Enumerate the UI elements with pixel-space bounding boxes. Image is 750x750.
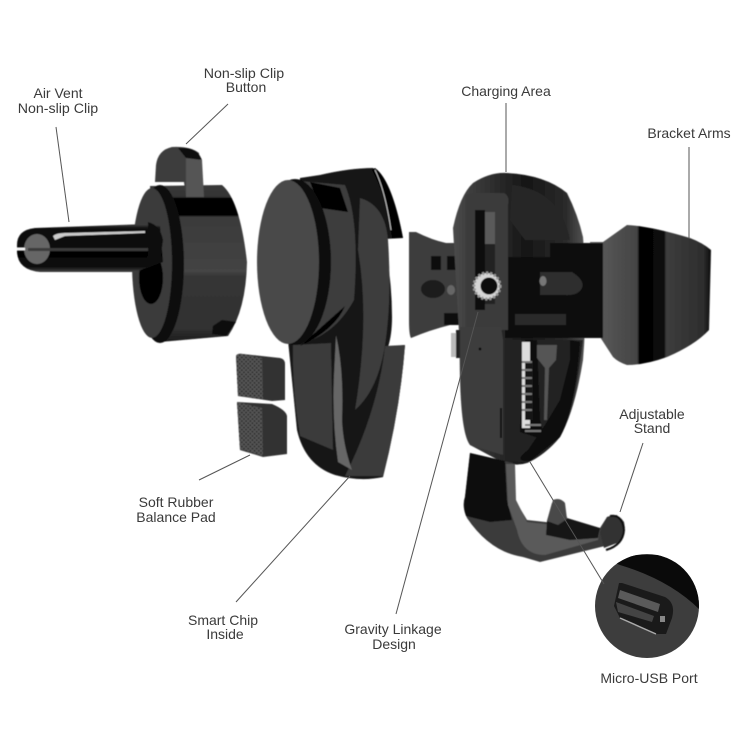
label: Gravity Linkage Design (344, 312, 478, 652)
label: Air Vent Non-slip Clip: Air Vent (33, 85, 83, 101)
ring face (136, 185, 184, 343)
label: Charging Area: Charging Area (461, 83, 551, 99)
part: mount with magnet disc (257, 168, 405, 479)
label: Soft Rubber Balance Pad (136, 455, 250, 525)
label: Adjustable Stand (619, 406, 685, 512)
back shell (453, 173, 586, 465)
label: Adjustable Stand: Stand (634, 420, 670, 436)
rear plate left (409, 232, 470, 338)
gear plate (466, 193, 508, 330)
spring side (451, 333, 460, 357)
inner plate arm (505, 243, 603, 338)
inset: micro-USB port (595, 554, 700, 658)
label: Non-slip Clip Button: Button (226, 79, 266, 95)
label: Adjustable Stand: Adjustable (619, 406, 685, 422)
part: air vent clip (17, 147, 247, 343)
label: Gravity Linkage Design: Design (372, 636, 416, 652)
part: phone holder cradle (409, 173, 711, 562)
bracket arms (590, 225, 711, 365)
label: Bracket Arms (647, 125, 731, 238)
clip tab (155, 147, 203, 197)
exploded diagram of car phone holder (16, 68, 730, 683)
label: Air Vent Non-slip Clip: Non-slip Clip (18, 101, 98, 117)
lower plate (293, 343, 333, 450)
label: Smart Chip Inside: Inside (206, 626, 244, 642)
lower plate (460, 327, 503, 455)
label: Smart Chip Inside (188, 476, 350, 642)
label: Bracket Arms: Bracket Arms (647, 125, 731, 141)
label: Soft Rubber Balance Pad: Soft Rubber (139, 494, 214, 510)
label: Smart Chip Inside: Smart Chip (188, 612, 258, 628)
stalk opening (139, 252, 163, 304)
spring chamber (505, 340, 583, 463)
label: Micro-USB Port (530, 462, 698, 686)
label: Charging Area (461, 83, 551, 172)
label: Soft Rubber Balance Pad: Balance Pad (136, 509, 216, 525)
label: Micro-USB Port: Micro-USB Port (600, 670, 698, 686)
vent stalk (17, 224, 163, 272)
label: Gravity Linkage Design: Gravity Linkage (344, 621, 442, 637)
label: Non-slip Clip Button (186, 66, 284, 144)
stand (464, 453, 625, 562)
part: rubber pads (236, 354, 287, 457)
magnet disc (259, 179, 331, 345)
gear (474, 273, 500, 299)
cylinder (288, 180, 356, 344)
label: Air Vent Non-slip Clip (18, 85, 98, 222)
hook top (288, 168, 405, 479)
ring body (150, 185, 247, 342)
label: Non-slip Clip Button: Non-slip Clip (204, 66, 284, 82)
